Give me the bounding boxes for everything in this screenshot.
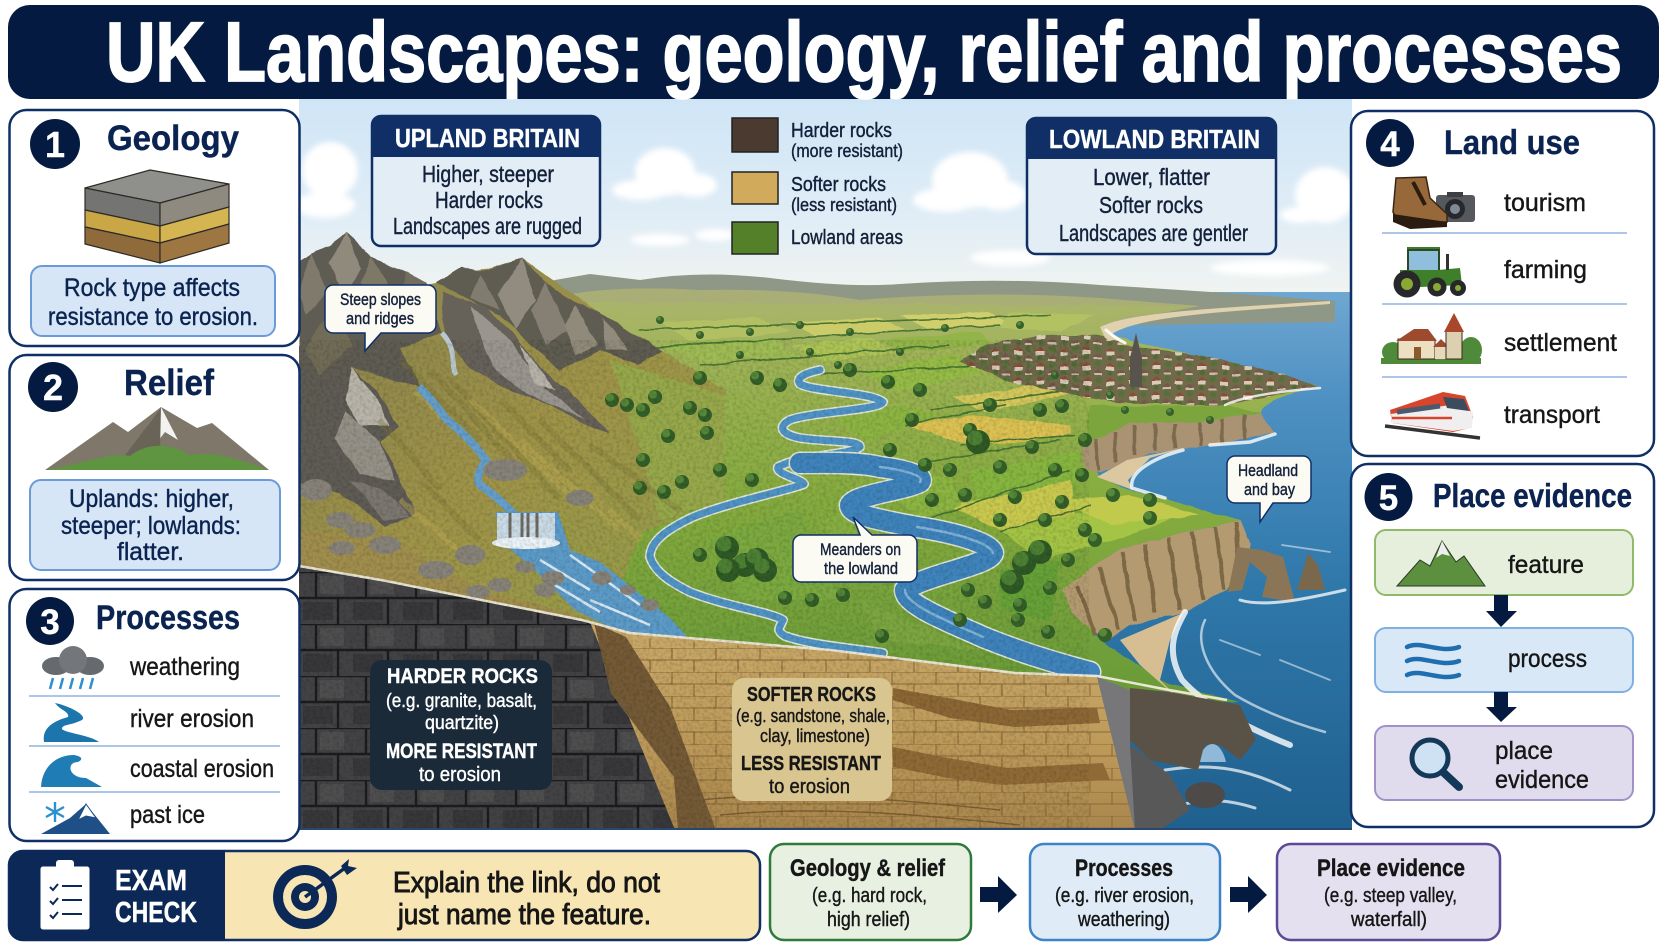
note: rock type: [31, 266, 275, 336]
number badge 5: 5: [1379, 479, 1398, 518]
legend: lowland areas: Lowland areas: [791, 227, 903, 249]
note: uplands and lowlands: Uplands: higher,: [69, 485, 234, 513]
exam check bar: just name the feature.: [397, 899, 651, 931]
hard rock cross-section: [299, 567, 680, 830]
upland britain box: Landscapes are rugged: [393, 213, 582, 239]
second range: [436, 258, 662, 370]
exam tip text: Explain the link, do not: [393, 867, 660, 899]
sea cliff and lower arch: [1097, 677, 1256, 830]
main peak massif: [299, 233, 442, 440]
row: coastal erosion: [41, 755, 274, 787]
callout: headland and bay: Headland: [1238, 461, 1298, 480]
lowland britain box: Landscapes are gentler: [1059, 220, 1248, 246]
row: coastal erosion: coastal erosion: [130, 755, 274, 783]
chain box: geology and relief: high relief): [827, 909, 910, 931]
exam check bar: [9, 850, 760, 941]
arrow: feature to process: [1486, 595, 1517, 627]
heading: relief: Relief: [124, 362, 215, 403]
upland britain box: Harder rocks: [435, 187, 543, 213]
callout: steep slopes: Steep slopes: [340, 290, 421, 309]
note: uplands and lowlands: flatter.: [117, 538, 184, 566]
label: harder rocks: to erosion: [419, 764, 501, 786]
label: softer rocks: clay, limestone): [760, 726, 870, 746]
hedgerows: [640, 315, 1090, 532]
surf: [1106, 330, 1345, 815]
church spire: [1130, 333, 1142, 387]
chain box: geology and relief: Geology & relief: [790, 855, 946, 882]
trees: [605, 316, 1214, 643]
panel 4: land use: [1351, 111, 1654, 456]
sky: [299, 99, 1352, 292]
upper and left branch: [650, 370, 883, 653]
label: softer rocks: (e.g. sandstone, shale,: [736, 706, 890, 726]
number badge 3: 3: [40, 603, 60, 642]
coastal strip above first cliff: [1087, 404, 1262, 441]
row: past ice: [41, 801, 205, 834]
legend: harder rocks: (more resistant): [791, 141, 903, 161]
number badge 4: 4: [1380, 125, 1400, 164]
legend: softer rocks: Softer rocks: [791, 174, 886, 196]
label: softer rocks: to erosion: [769, 776, 850, 798]
row: river erosion: [44, 703, 254, 742]
chain box: processes: [1030, 844, 1220, 940]
lower crag: [299, 368, 416, 527]
row: farming: farming: [1504, 256, 1587, 284]
label: harder rocks: quartzite): [425, 713, 499, 734]
legend: softer rocks: (less resistant): [791, 195, 897, 215]
row: settlement: settlement: [1504, 329, 1617, 357]
legend: harder rocks: Harder rocks: [791, 120, 892, 142]
row dividers: [29, 696, 280, 792]
number badge 2: 2: [43, 367, 63, 408]
callout: meanders: Meanders on: [820, 540, 901, 559]
sea: [1090, 292, 1360, 830]
chain box: geology and relief: [770, 844, 971, 940]
upland britain box: Higher, steeper: [422, 161, 554, 187]
exam check bar: CHECK: [115, 897, 197, 929]
mountain stream and waterfall: [419, 333, 690, 640]
number badge 1: [30, 119, 80, 169]
boulders: [300, 459, 659, 611]
farmland base: [586, 301, 1318, 702]
note: rock type: resistance to erosion.: [48, 303, 258, 331]
label: harder rocks: HARDER ROCKS: [387, 665, 538, 688]
row dividers: [1382, 233, 1627, 377]
label: softer rocks: [732, 678, 892, 801]
illustration: landscape scene: [295, 99, 1360, 830]
first cliffs: [1080, 413, 1273, 472]
distant hills: [554, 274, 1335, 326]
number badge 1: 1: [45, 124, 65, 165]
exam check label: EXAM: [115, 865, 187, 897]
icon: target: [273, 859, 357, 929]
callout: steep slopes: and ridges: [346, 309, 414, 328]
row: weathering: weathering: [129, 653, 240, 681]
callout: steep slopes: [325, 285, 436, 351]
heading: geology: Geology: [107, 119, 239, 158]
row: past ice: past ice: [130, 801, 205, 829]
soft rock cross-section: [590, 622, 1135, 830]
chain box: processes: weathering): [1077, 909, 1170, 931]
lowland britain box: Softer rocks: [1099, 192, 1203, 218]
painterly texture overlay: [299, 340, 1089, 830]
chain box: geology and relief: (e.g. hard rock,: [812, 885, 927, 907]
number badge 5: [1364, 473, 1412, 521]
icon: clipboard: [40, 860, 90, 930]
upland britain box: UPLAND BRITAIN: [395, 123, 580, 153]
scene base line: [299, 828, 1352, 830]
panel 1: geology: [10, 110, 300, 346]
row: settlement: [1381, 313, 1617, 364]
number badge 2: [28, 362, 78, 412]
number badge 4: [1366, 119, 1414, 167]
note: uplands and lowlands: steeper; lowlands:: [61, 512, 241, 540]
far hillside: [299, 258, 725, 640]
note: uplands and lowlands: [30, 480, 280, 570]
step: process: [1375, 628, 1633, 692]
legend: harder rocks: [732, 118, 903, 161]
label: softer rocks: SOFTER ROCKS: [747, 684, 876, 706]
legend: lowland areas: [732, 222, 903, 254]
arrow: process to place evidence: [1486, 692, 1517, 722]
clouds: [295, 142, 1355, 276]
panel 5: place evidence: [1351, 464, 1654, 827]
row: farming: [1394, 247, 1587, 298]
row: tourism: tourism: [1504, 189, 1586, 217]
row: tourism: [1393, 177, 1586, 229]
row: river erosion: river erosion: [130, 705, 254, 733]
step: place evidence: evidence: [1495, 766, 1589, 794]
upland britain box: [372, 116, 600, 246]
chain box: place evidence: waterfall): [1350, 909, 1427, 931]
step: feature: [1375, 530, 1633, 595]
beaches: [1097, 301, 1330, 700]
chain box: place evidence: [1277, 844, 1500, 940]
legend: [732, 118, 903, 254]
title banner: [8, 5, 1659, 99]
icon: mountains: [45, 407, 269, 470]
legend: softer rocks: [732, 172, 897, 215]
callout: headland and bay: and bay: [1244, 480, 1295, 499]
row: transport: transport: [1504, 401, 1600, 429]
chain box: processes: Processes: [1075, 855, 1173, 882]
lowland britain box: LOWLAND BRITAIN: [1049, 124, 1260, 154]
heading: processes: Processes: [96, 599, 240, 637]
town: [960, 335, 1317, 406]
row: transport: [1385, 392, 1600, 438]
chain box: processes: (e.g. river erosion,: [1055, 885, 1194, 907]
farm fields: [660, 312, 1200, 650]
label: softer rocks: LESS RESISTANT: [741, 753, 881, 775]
middle crag: [442, 292, 609, 433]
panel 2: relief: [10, 355, 300, 580]
row: weathering: [42, 646, 240, 689]
chain box: place evidence: (e.g. steep valley,: [1324, 885, 1457, 907]
second cliffs: [1063, 520, 1250, 640]
callout: meanders: [793, 517, 917, 582]
arrow: geology to processes: [980, 876, 1017, 913]
number badge 3: [26, 597, 74, 645]
step: place evidence: place: [1495, 737, 1553, 765]
icon: rock layers block: [85, 170, 229, 263]
callout: headland and bay: [1227, 456, 1311, 522]
hillside striations: [380, 360, 680, 540]
chain box: place evidence: Place evidence: [1317, 855, 1465, 882]
label: harder rocks: MORE RESISTANT: [386, 740, 537, 763]
lowland britain box: [1027, 118, 1276, 254]
panel 3: processes: [10, 589, 300, 841]
note: rock type: Rock type affects: [64, 274, 240, 302]
heading: land use: Land use: [1444, 124, 1580, 162]
surface line: [299, 566, 1227, 700]
sea arch and stack: [1228, 547, 1325, 602]
lowland britain box: Lower, flatter: [1093, 164, 1210, 190]
step: process: process: [1508, 645, 1587, 673]
label: harder rocks: (e.g. granite, basalt,: [386, 691, 537, 712]
step: feature: feature: [1508, 551, 1584, 579]
meandering river: [650, 370, 1090, 672]
step: place evidence: [1375, 726, 1633, 800]
arrow: processes to place evidence: [1230, 876, 1267, 913]
label: harder rocks: [370, 660, 552, 790]
callout: meanders: the lowland: [824, 559, 898, 578]
right branch: [800, 463, 1090, 672]
